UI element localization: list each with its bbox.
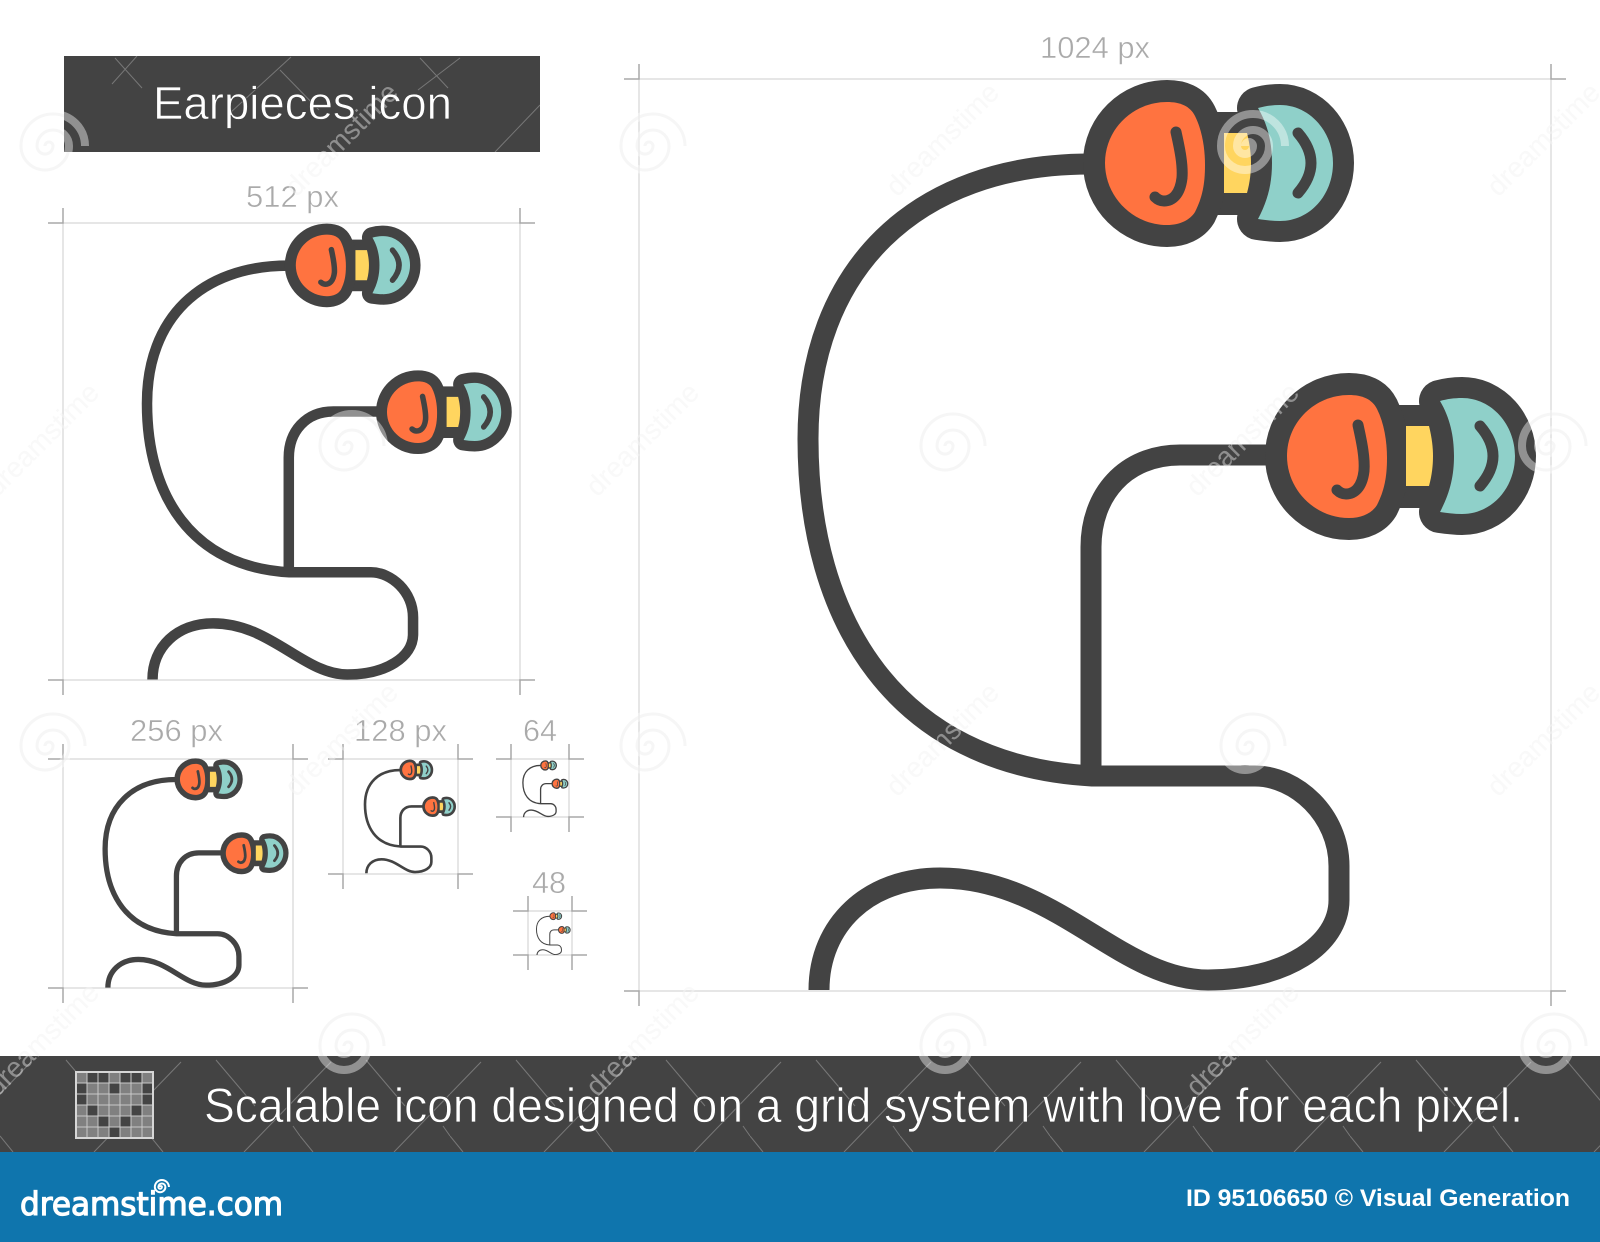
watermark text over dark shapes: dreamstime: [880, 77, 1005, 202]
icon: earpieces 48: [536, 913, 570, 955]
128 px preview: [328, 713, 473, 889]
watermark text on white: dreamstime: [279, 677, 404, 802]
band text: Scalable icon designed on a grid system with love for each pixel.: [204, 1080, 1523, 1133]
watermark text over dark shapes: dreamstime: [880, 677, 1005, 802]
label: 256 px: 256 px: [130, 713, 223, 748]
title text: Earpieces icon: [153, 77, 452, 129]
label: 1024 px: 1024 px: [1040, 30, 1150, 65]
dreamstime logo: dreamstime.com: [20, 1185, 283, 1223]
icon: earpieces large: [808, 102, 1515, 990]
watermark text on white: dreamstime: [279, 77, 404, 202]
icon: earpieces 128: [365, 762, 453, 873]
icon: earpieces 512: [147, 235, 501, 679]
title bar: [64, 56, 540, 152]
watermark text over dark shapes: dreamstime: [1180, 977, 1305, 1102]
label: 48: 48: [532, 865, 566, 900]
watermark text on white: dreamstime: [880, 77, 1005, 202]
image id and credit: ID 95106650 © Visual Generation: [1186, 1185, 1570, 1212]
label: 64: 64: [523, 713, 557, 748]
watermark spirals on white: [21, 114, 1586, 1070]
512 px preview: [48, 179, 535, 695]
watermark text over dark shapes: dreamstime: [1180, 377, 1305, 502]
48 px preview: [513, 865, 587, 970]
icon: earpieces 64: [523, 762, 567, 817]
watermark text on white: dreamstime: [580, 377, 705, 502]
icon: pixel grid: [76, 1072, 153, 1138]
watermark text over dark shapes: dreamstime: [580, 377, 705, 502]
watermark text over dark shapes: dreamstime: [279, 677, 404, 802]
256 px preview: [48, 713, 308, 1003]
grey info band: [0, 1056, 1600, 1152]
icon: earpieces 256: [105, 764, 283, 988]
watermark text on white: dreamstime: [1180, 977, 1305, 1102]
blue footer band: [0, 1152, 1600, 1242]
watermark text on white: dreamstime: [580, 977, 705, 1102]
watermark text on white: dreamstime: [1180, 377, 1305, 502]
watermark text over dark shapes: dreamstime: [279, 77, 404, 202]
watermark text over dark shapes: dreamstime: [580, 977, 705, 1102]
label: 128 px: 128 px: [354, 713, 447, 748]
watermark text on white: dreamstime: [880, 677, 1005, 802]
watermark spirals over dark shapes: [21, 114, 1586, 1070]
64 px preview: [496, 713, 584, 832]
label: 512 px: 512 px: [246, 179, 339, 214]
